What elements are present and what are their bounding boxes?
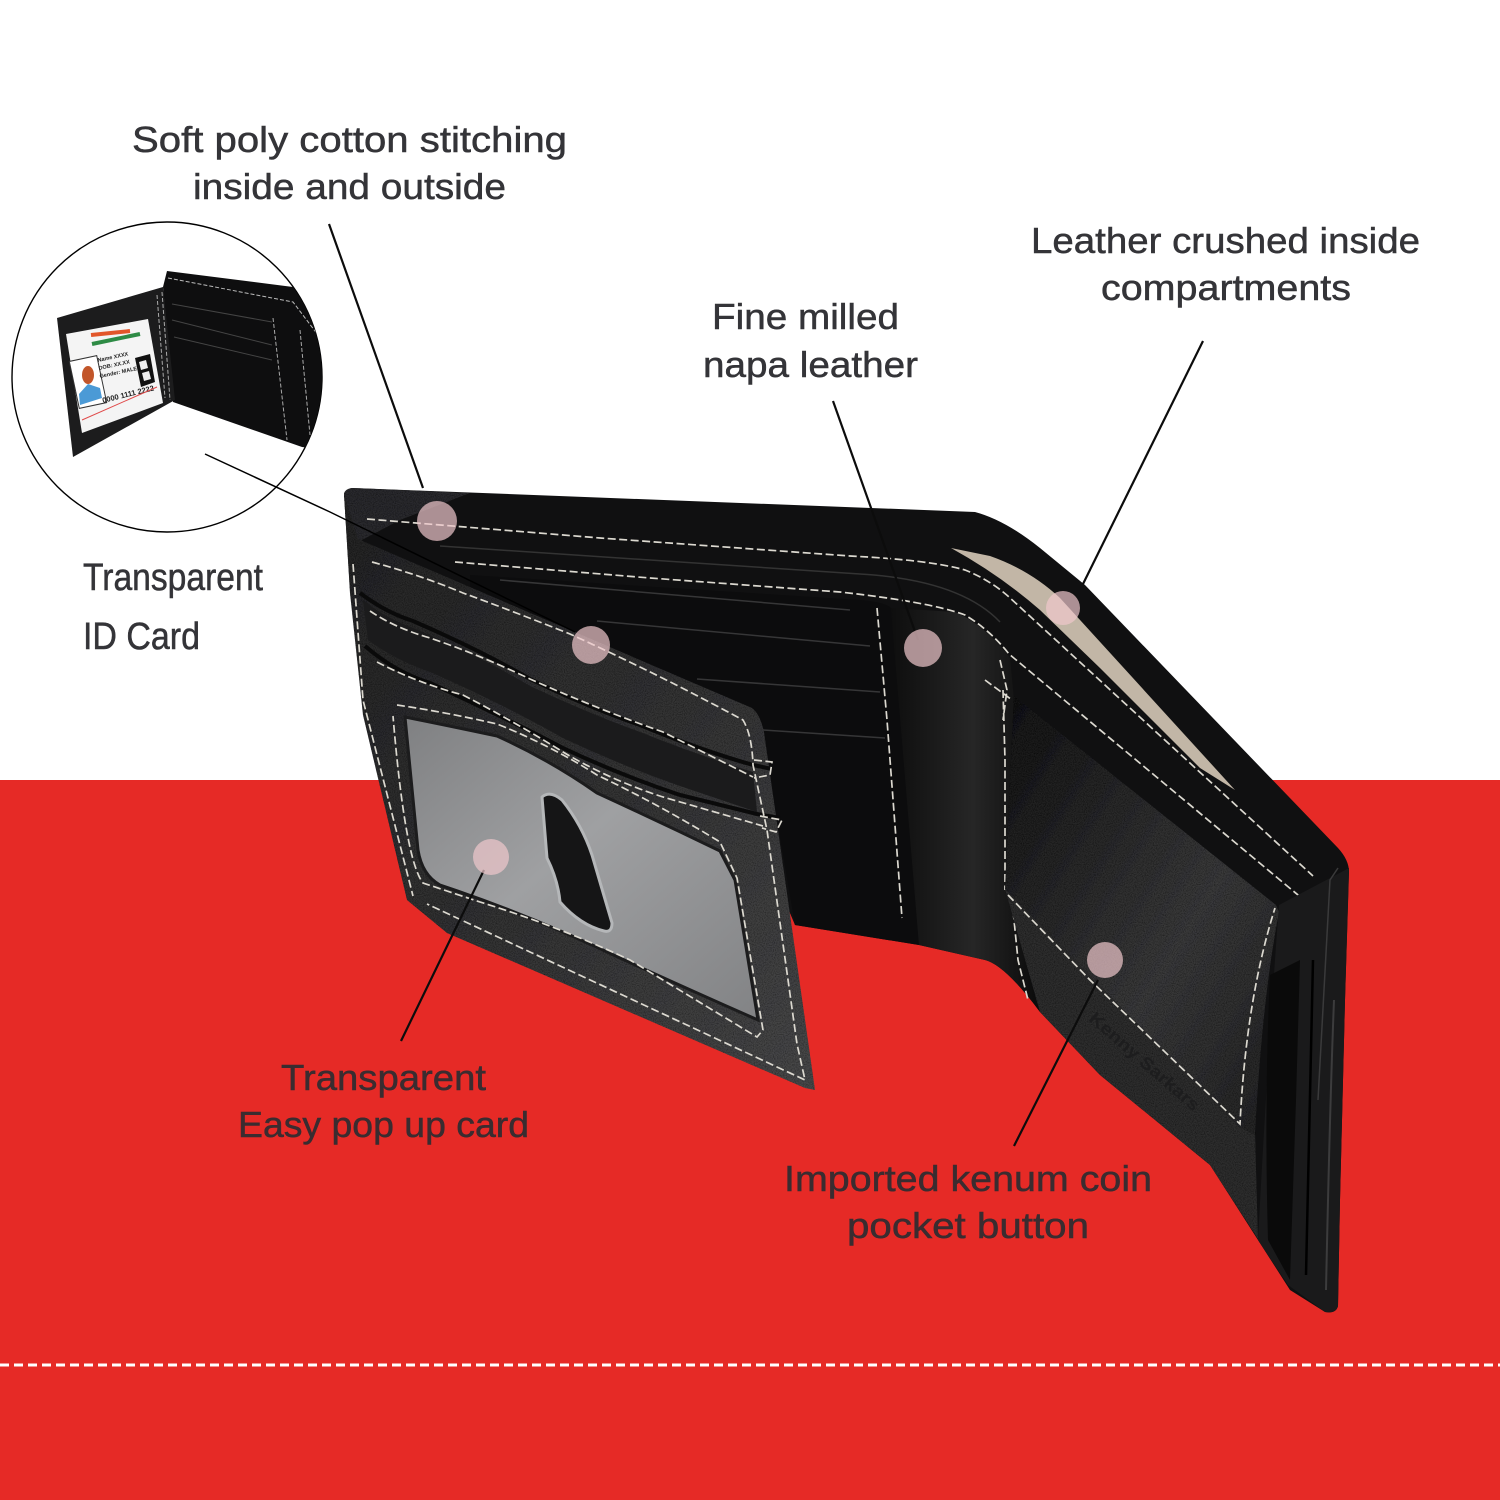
transparent window — [405, 717, 758, 1020]
marker dot: ID card — [572, 626, 610, 664]
label: coin pocket — [784, 1158, 1152, 1246]
label: coin pocket: Imported kenum coin — [784, 1158, 1152, 1199]
label: pop up card: Transparent — [281, 1057, 486, 1098]
finger slot — [542, 794, 612, 931]
label: pop up card — [238, 1057, 529, 1145]
leader line: napa leather — [833, 401, 918, 640]
marker dot: napa leather — [904, 629, 942, 667]
card text: Name XXXX — [97, 352, 129, 364]
card text: DOB: XX.XX — [98, 359, 131, 372]
front card panel — [344, 494, 815, 1090]
card tricolour bars — [91, 331, 130, 335]
inset left panel — [57, 287, 175, 457]
pocket edges — [360, 593, 780, 818]
label: ID card — [83, 557, 263, 658]
label: stitching: Soft poly cotton stitching — [132, 119, 567, 160]
QR code — [135, 354, 155, 387]
label: ID card: ID Card — [83, 616, 200, 658]
background: white upper area — [0, 0, 1500, 780]
label: stitching: inside and outside — [193, 166, 506, 207]
marker dot: pop up card — [473, 839, 509, 875]
marker dot: leather crushed — [1046, 591, 1080, 625]
label: leather crushed: compartments — [1101, 267, 1351, 308]
card text: Gender: MALE — [99, 366, 138, 380]
label: napa leather: napa leather — [703, 344, 918, 385]
label: pop up card: Easy pop up card — [238, 1104, 529, 1145]
card panel stitching — [353, 562, 805, 1080]
beige lining — [951, 548, 1235, 790]
coin pocket flap — [1005, 696, 1279, 1135]
circle outline — [12, 222, 322, 532]
right gusset — [1258, 868, 1349, 1312]
card text: 0000 1111 2222 — [101, 383, 155, 405]
leader line: coin pocket — [1014, 980, 1098, 1146]
inset circle — [12, 222, 325, 532]
wallet back shell — [344, 488, 1349, 1312]
leader line: ID card — [205, 454, 575, 632]
label: napa leather: Fine milled — [712, 296, 899, 337]
coin pocket lower panel — [1005, 889, 1288, 1285]
label: napa leather — [703, 296, 918, 385]
inset wallet — [57, 271, 325, 457]
background: red lower band — [0, 780, 1500, 1500]
marker dot: coin pocket — [1087, 942, 1123, 978]
brand emboss: Kenny Sarkars — [1085, 1009, 1204, 1115]
card portrait — [79, 366, 102, 405]
card red rule — [82, 387, 157, 420]
label: coin pocket: pocket button — [847, 1205, 1089, 1246]
dashed stitch line — [0, 1364, 1500, 1366]
label: ID card: Transparent — [83, 557, 263, 599]
middle spine — [891, 608, 1040, 1012]
top-left grain wedge — [344, 488, 470, 590]
inner back card panel — [470, 575, 919, 945]
label: stitching — [132, 119, 567, 207]
flap stitching — [1008, 895, 1275, 1124]
leader line: stitching — [329, 224, 423, 488]
card text — [97, 352, 155, 405]
label: leather crushed — [1031, 220, 1420, 308]
top stitching rows — [367, 519, 1316, 1000]
leader line: pop up card — [401, 870, 484, 1041]
label: leather crushed: Leather crushed inside — [1031, 220, 1420, 261]
inset stitches and slots — [157, 278, 318, 440]
leader line: leather crushed — [1083, 341, 1203, 584]
wallet illustration — [344, 488, 1349, 1312]
marker dot: stitching — [417, 501, 457, 541]
card slot lines — [440, 546, 1000, 738]
card photo — [69, 356, 107, 408]
inset ID card — [66, 319, 163, 433]
inset right panel — [163, 271, 325, 450]
